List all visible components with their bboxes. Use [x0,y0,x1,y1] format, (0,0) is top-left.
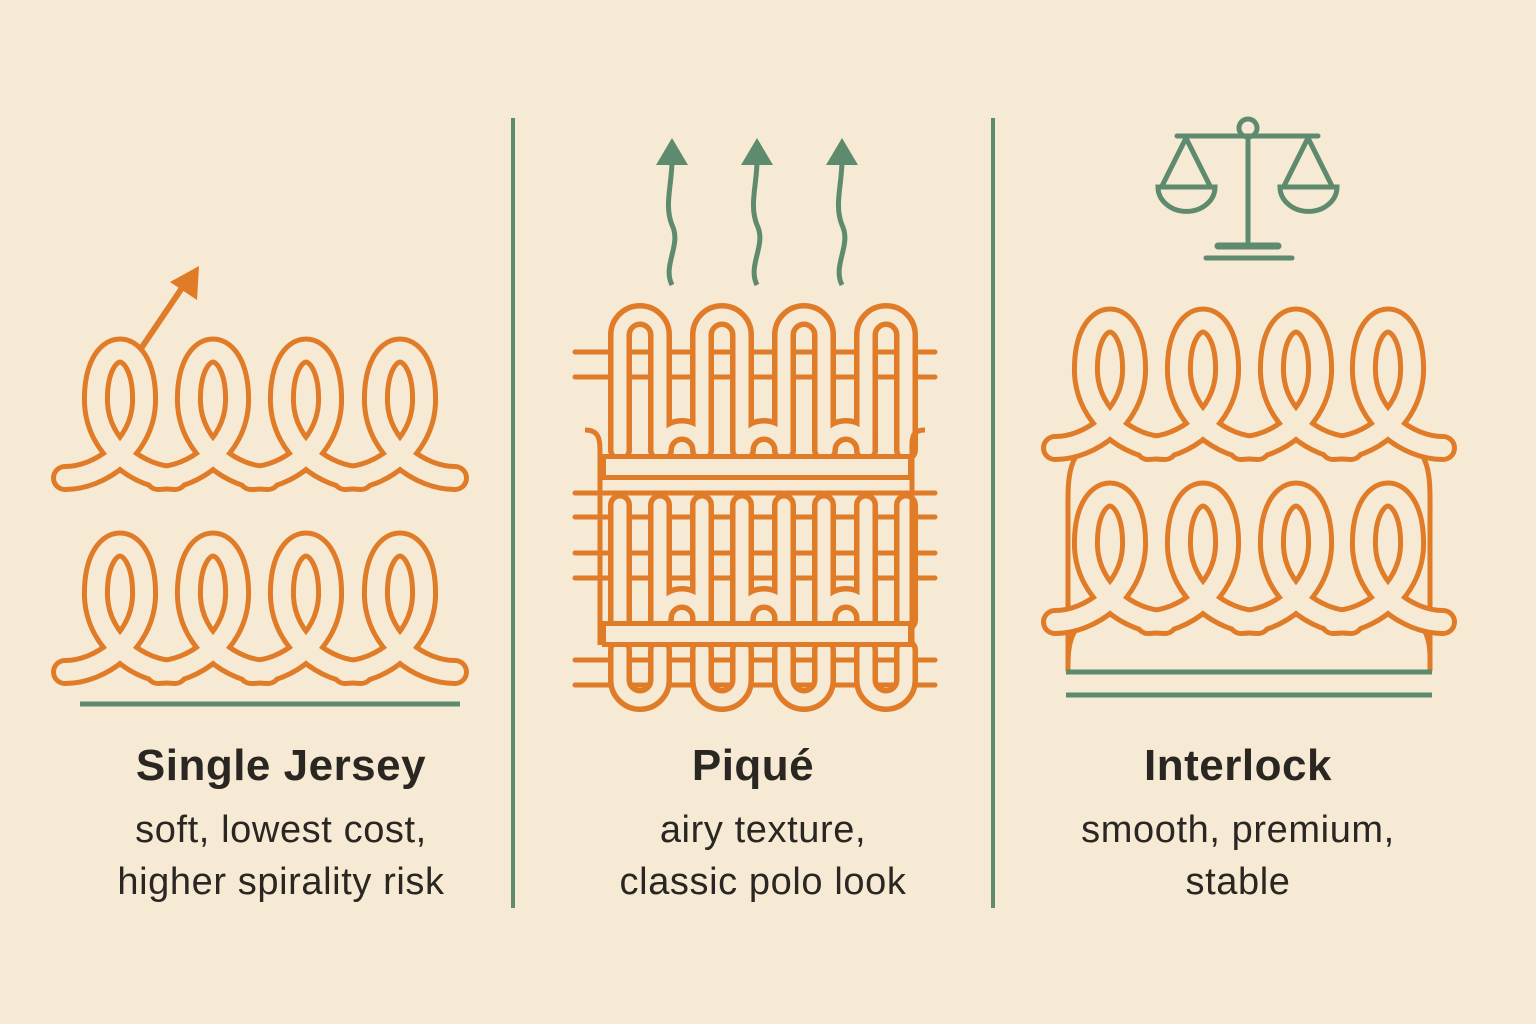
heading: Single Jersey: Single Jersey [136,741,426,790]
text: pique description: airy texture, [660,809,866,851]
text: jersey description [117,809,445,903]
heading: Piqué: Piqué [692,741,814,790]
divider left [511,118,515,908]
text: jersey description: soft, lowest cost, [135,809,427,851]
icon: balance scale [1158,119,1337,258]
icon: breathability arrows [656,138,858,285]
text: pique description [620,809,906,903]
text: interlock description: stable [1185,861,1290,903]
text: jersey description: higher spirality risk [117,861,445,903]
text: interlock description [1081,809,1395,903]
pique knit diagram [575,315,935,700]
divider right [991,118,995,908]
icon: spirality arrow [140,266,199,350]
jersey knit diagram [65,350,460,704]
heading: Interlock: Interlock [1144,741,1332,790]
text: interlock description: smooth, premium, [1081,809,1395,851]
text: pique description: classic polo look [620,861,906,903]
interlock knit diagram [1055,320,1443,695]
